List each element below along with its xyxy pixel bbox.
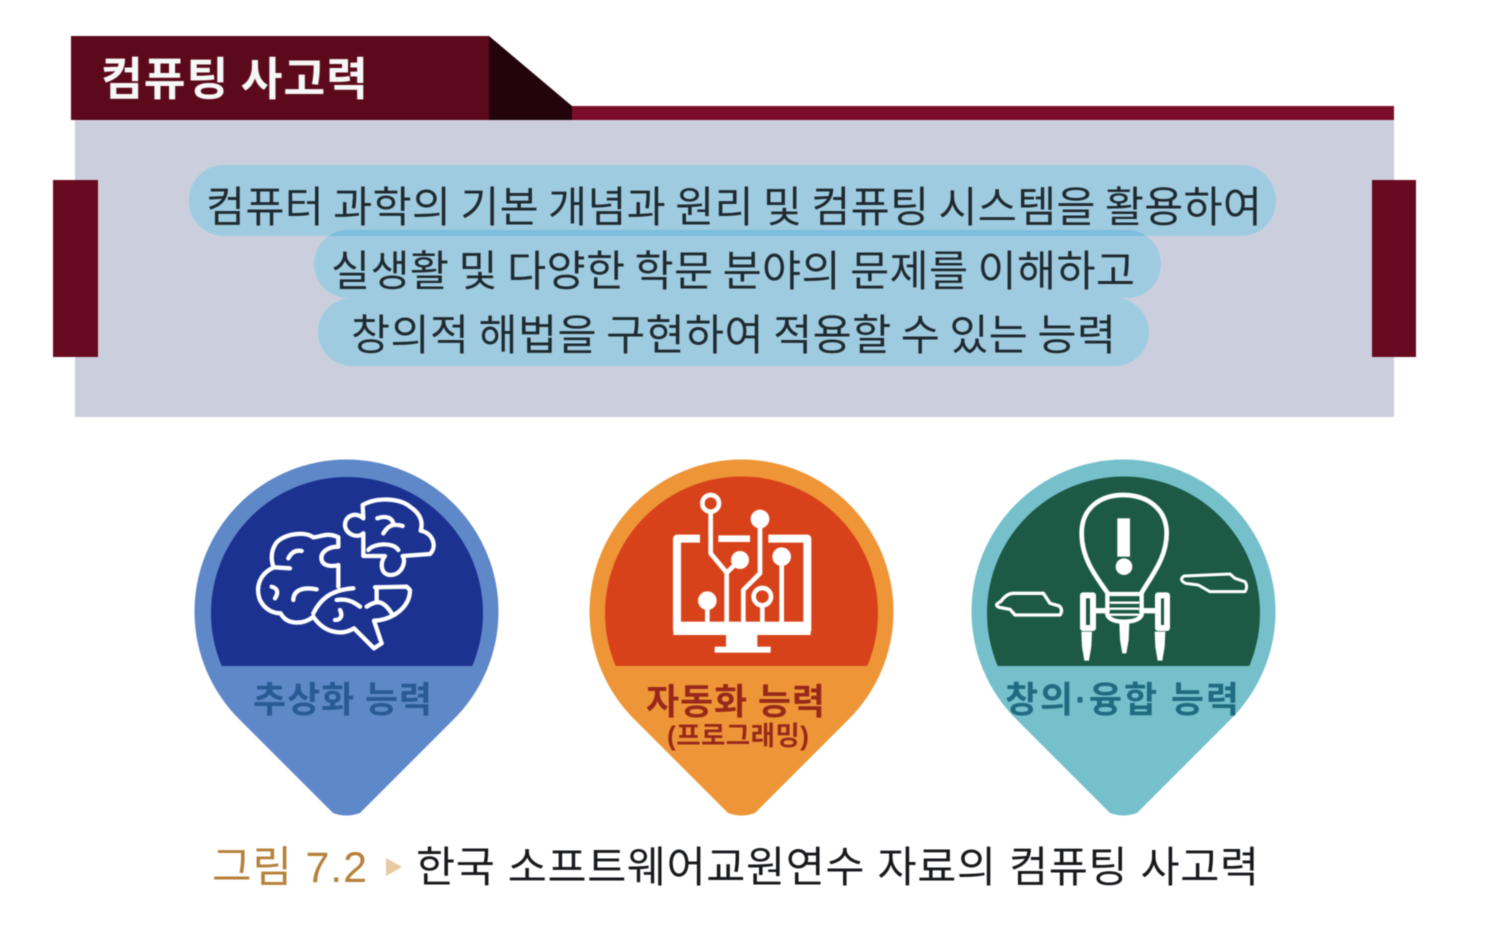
label: creativity and convergence: 창의·융합 능력 (1005, 679, 1239, 720)
pin: creativity and convergence (971, 460, 1275, 816)
figure number: 그림 7.2 (212, 844, 367, 892)
right side bar (1372, 180, 1416, 357)
definition line 3: 창의적 해법을 구현하여 적용할 수 있는 능력 (351, 313, 1116, 360)
caption (212, 844, 1259, 892)
icon: light bulb and clouds (997, 495, 1247, 661)
icon: caption arrow (386, 858, 402, 876)
definition line 2: 실생활 및 다양한 학문 분야의 문제를 이해하고 (331, 249, 1135, 296)
label: abstraction: 추상화 능력 (253, 679, 432, 720)
icon: monitor circuit (673, 495, 811, 653)
icon: brain puzzle (258, 500, 434, 648)
caption text: 한국 소프트웨어교원연수 자료의 컴퓨팅 사고력 (416, 845, 1259, 892)
header: title band (71, 36, 1394, 120)
definition text block (189, 165, 1276, 366)
panel: definition background (75, 120, 1394, 417)
left side bar (53, 180, 98, 357)
label: programming: (프로그래밍) (667, 721, 809, 751)
definition line 1: 컴퓨터 과학의 기본 개념과 원리 및 컴퓨팅 시스템을 활용하여 (206, 185, 1262, 232)
pin: automation (590, 460, 894, 816)
pin: abstraction (194, 460, 499, 816)
heading: computational thinking: 컴퓨팅 사고력 (101, 54, 368, 105)
label: automation: 자동화 능력 (646, 681, 825, 722)
